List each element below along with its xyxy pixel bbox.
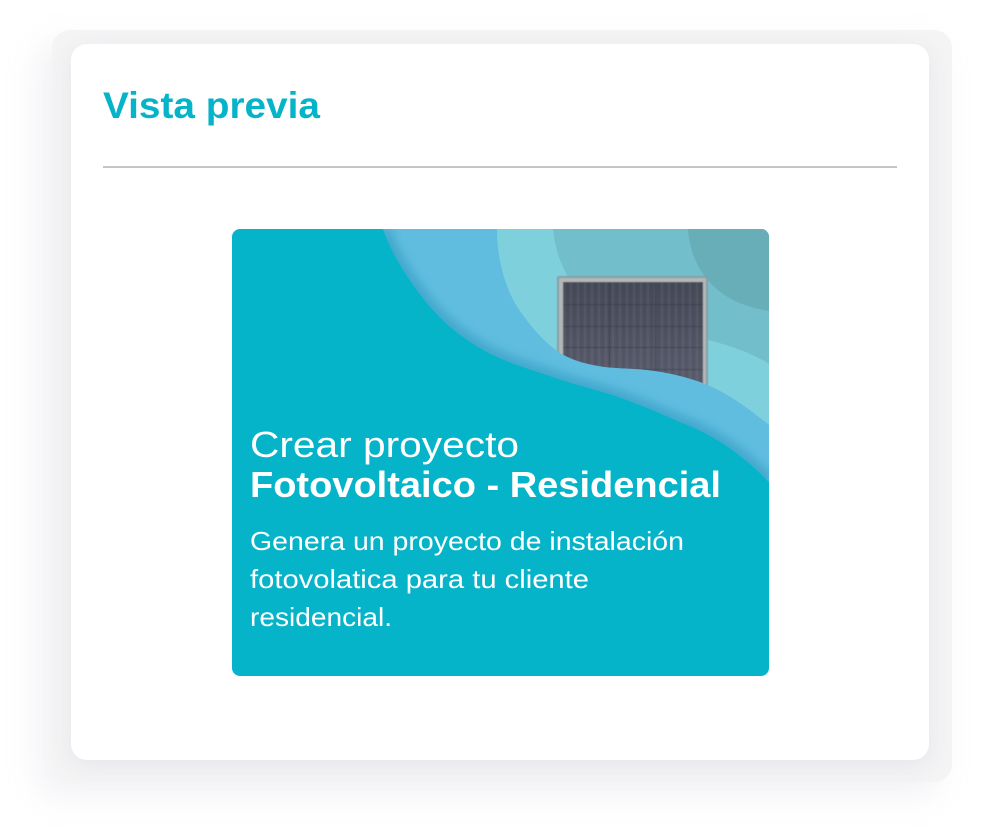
wave layer: dark aqua [688,229,769,311]
tile background [232,229,769,676]
tile description: Genera un proyecto de instalación [250,526,684,556]
title: Vista previa [103,85,320,126]
preview tile: Fotovoltaico Residencial [232,225,775,676]
tile heading [252,432,718,498]
tile description [250,526,684,632]
wave layer: muted aqua [553,229,769,364]
tile description: fotovolatica para tu cliente [250,564,589,594]
panel: preview card [71,44,929,760]
tile heading: Fotovoltaico - Residencial [250,464,721,505]
wave layer: blue swoosh [370,225,775,490]
wave layer: light aqua [490,229,769,440]
tile heading: Crear proyecto [250,424,519,465]
icon: solar panel [557,276,708,396]
tile description: residencial. [250,602,392,632]
